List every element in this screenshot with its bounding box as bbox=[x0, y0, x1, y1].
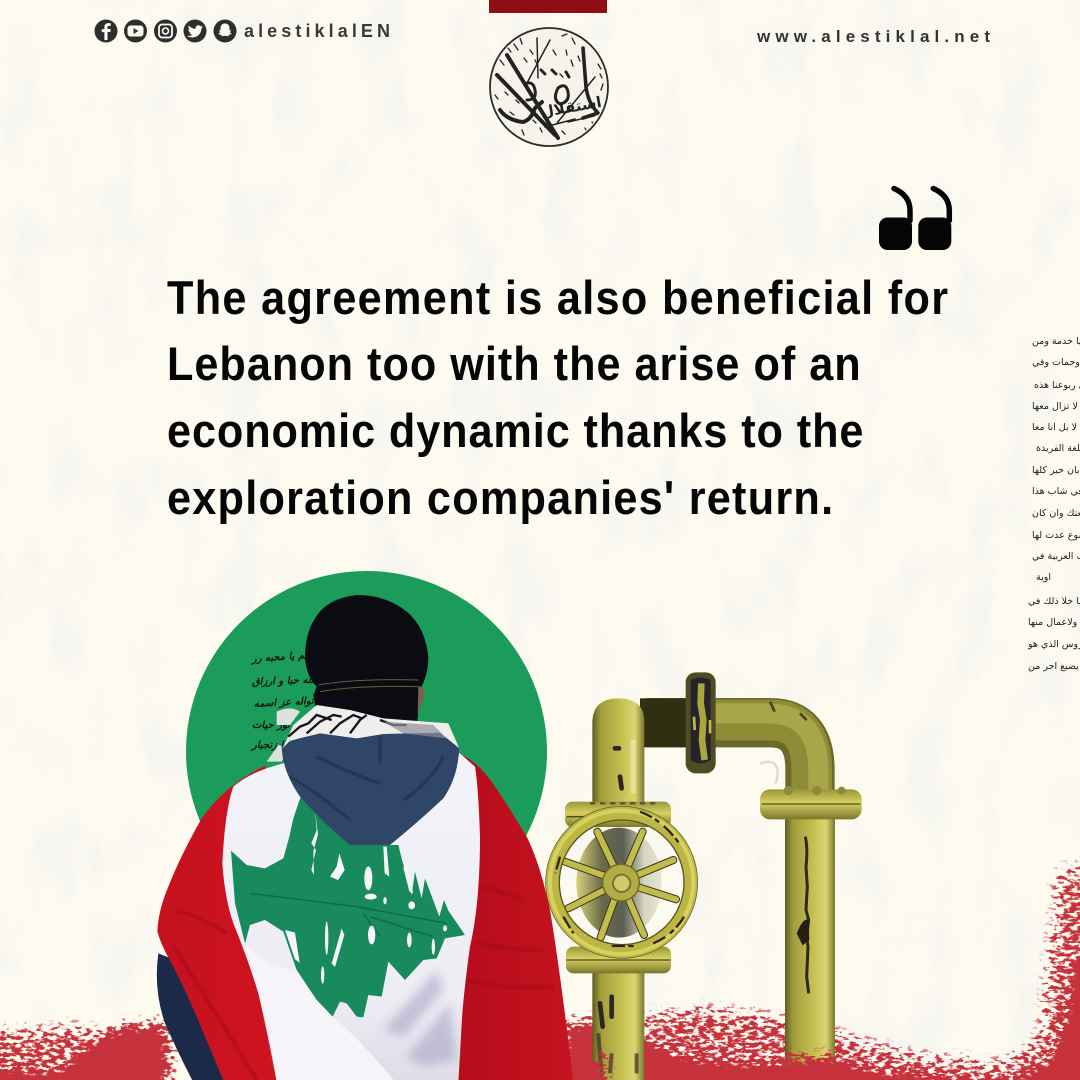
right flange bbox=[760, 786, 862, 819]
mask strap bbox=[318, 680, 418, 692]
handwritten arabic on circle: قلبنا بسيم يا محبه رر bbox=[249, 648, 341, 665]
handwritten arabic on circle: مسلم نور حیات bbox=[252, 720, 318, 731]
left pipe bbox=[592, 698, 644, 1080]
logo: alestiklal calligraphy roundel bbox=[490, 28, 608, 146]
arabic newspaper column at right edge bbox=[1027, 336, 1080, 672]
cloth fold shading bbox=[173, 887, 553, 1080]
quote text: The agreement is also beneficial for bbox=[167, 271, 948, 324]
hand holding flag bbox=[267, 708, 300, 762]
white band of flag bbox=[222, 730, 480, 1080]
logo wordmark: استقلال bbox=[539, 93, 603, 121]
valve body bbox=[576, 828, 662, 938]
handwritten arabic on circle: خلقه تواله عز اسمه bbox=[254, 695, 338, 710]
handwritten arabic on circle bbox=[249, 648, 341, 751]
small white pipe hook bbox=[760, 762, 778, 783]
social handle row bbox=[94, 20, 390, 42]
keffiyeh scarf bbox=[283, 705, 459, 748]
cloth grey creases bbox=[383, 970, 457, 1067]
website url: www.alestiklal.net bbox=[756, 27, 990, 46]
white lower fold bbox=[245, 943, 395, 1080]
arabic newspaper column at right edge: اوية bbox=[1036, 572, 1051, 583]
quote text: economic dynamic thanks to the bbox=[167, 404, 863, 457]
handwritten arabic on circle: وزنی الله حبا و ارزاق bbox=[252, 674, 341, 688]
top red bar bbox=[489, 0, 607, 13]
solid red paint brush strokes bbox=[0, 930, 1080, 1080]
ear bbox=[418, 686, 425, 715]
handwritten arabic on circle: خلف بنا زنجبار bbox=[250, 740, 313, 751]
quote mark icon bbox=[879, 188, 951, 250]
quote text: exploration companies' return. bbox=[167, 471, 833, 524]
illustration: yellow gas pipes with valve wheel bbox=[550, 672, 862, 1080]
pipe joint flange bbox=[686, 672, 716, 773]
left red band of flag bbox=[157, 765, 283, 1080]
illustration: person wrapped in Lebanese flag, seen from behind bbox=[157, 595, 573, 1080]
left flanges bbox=[565, 802, 671, 973]
icon: snapchat bbox=[214, 20, 236, 42]
icon: facebook bbox=[94, 20, 118, 42]
icon: twitter bbox=[184, 20, 206, 42]
quote text: Lebanon too with the arise of an bbox=[167, 337, 861, 390]
quote text bbox=[167, 271, 948, 524]
icon: youtube bbox=[124, 20, 147, 42]
cedar tree emblem bbox=[231, 797, 465, 1017]
green circle backdrop bbox=[186, 571, 547, 932]
handle text: alestiklalEN bbox=[244, 21, 390, 41]
hoodie bbox=[282, 732, 459, 845]
right red band of flag bbox=[458, 755, 573, 1080]
dark trousers sliver bbox=[157, 953, 230, 1080]
head of hair bbox=[305, 595, 428, 727]
right pipe with elbow bbox=[640, 698, 835, 1073]
red paint over pipe feet bbox=[582, 1056, 850, 1080]
sparse speckled red paint bbox=[0, 868, 1080, 1080]
valve hand wheel bbox=[550, 811, 693, 954]
icon: instagram bbox=[154, 20, 177, 42]
